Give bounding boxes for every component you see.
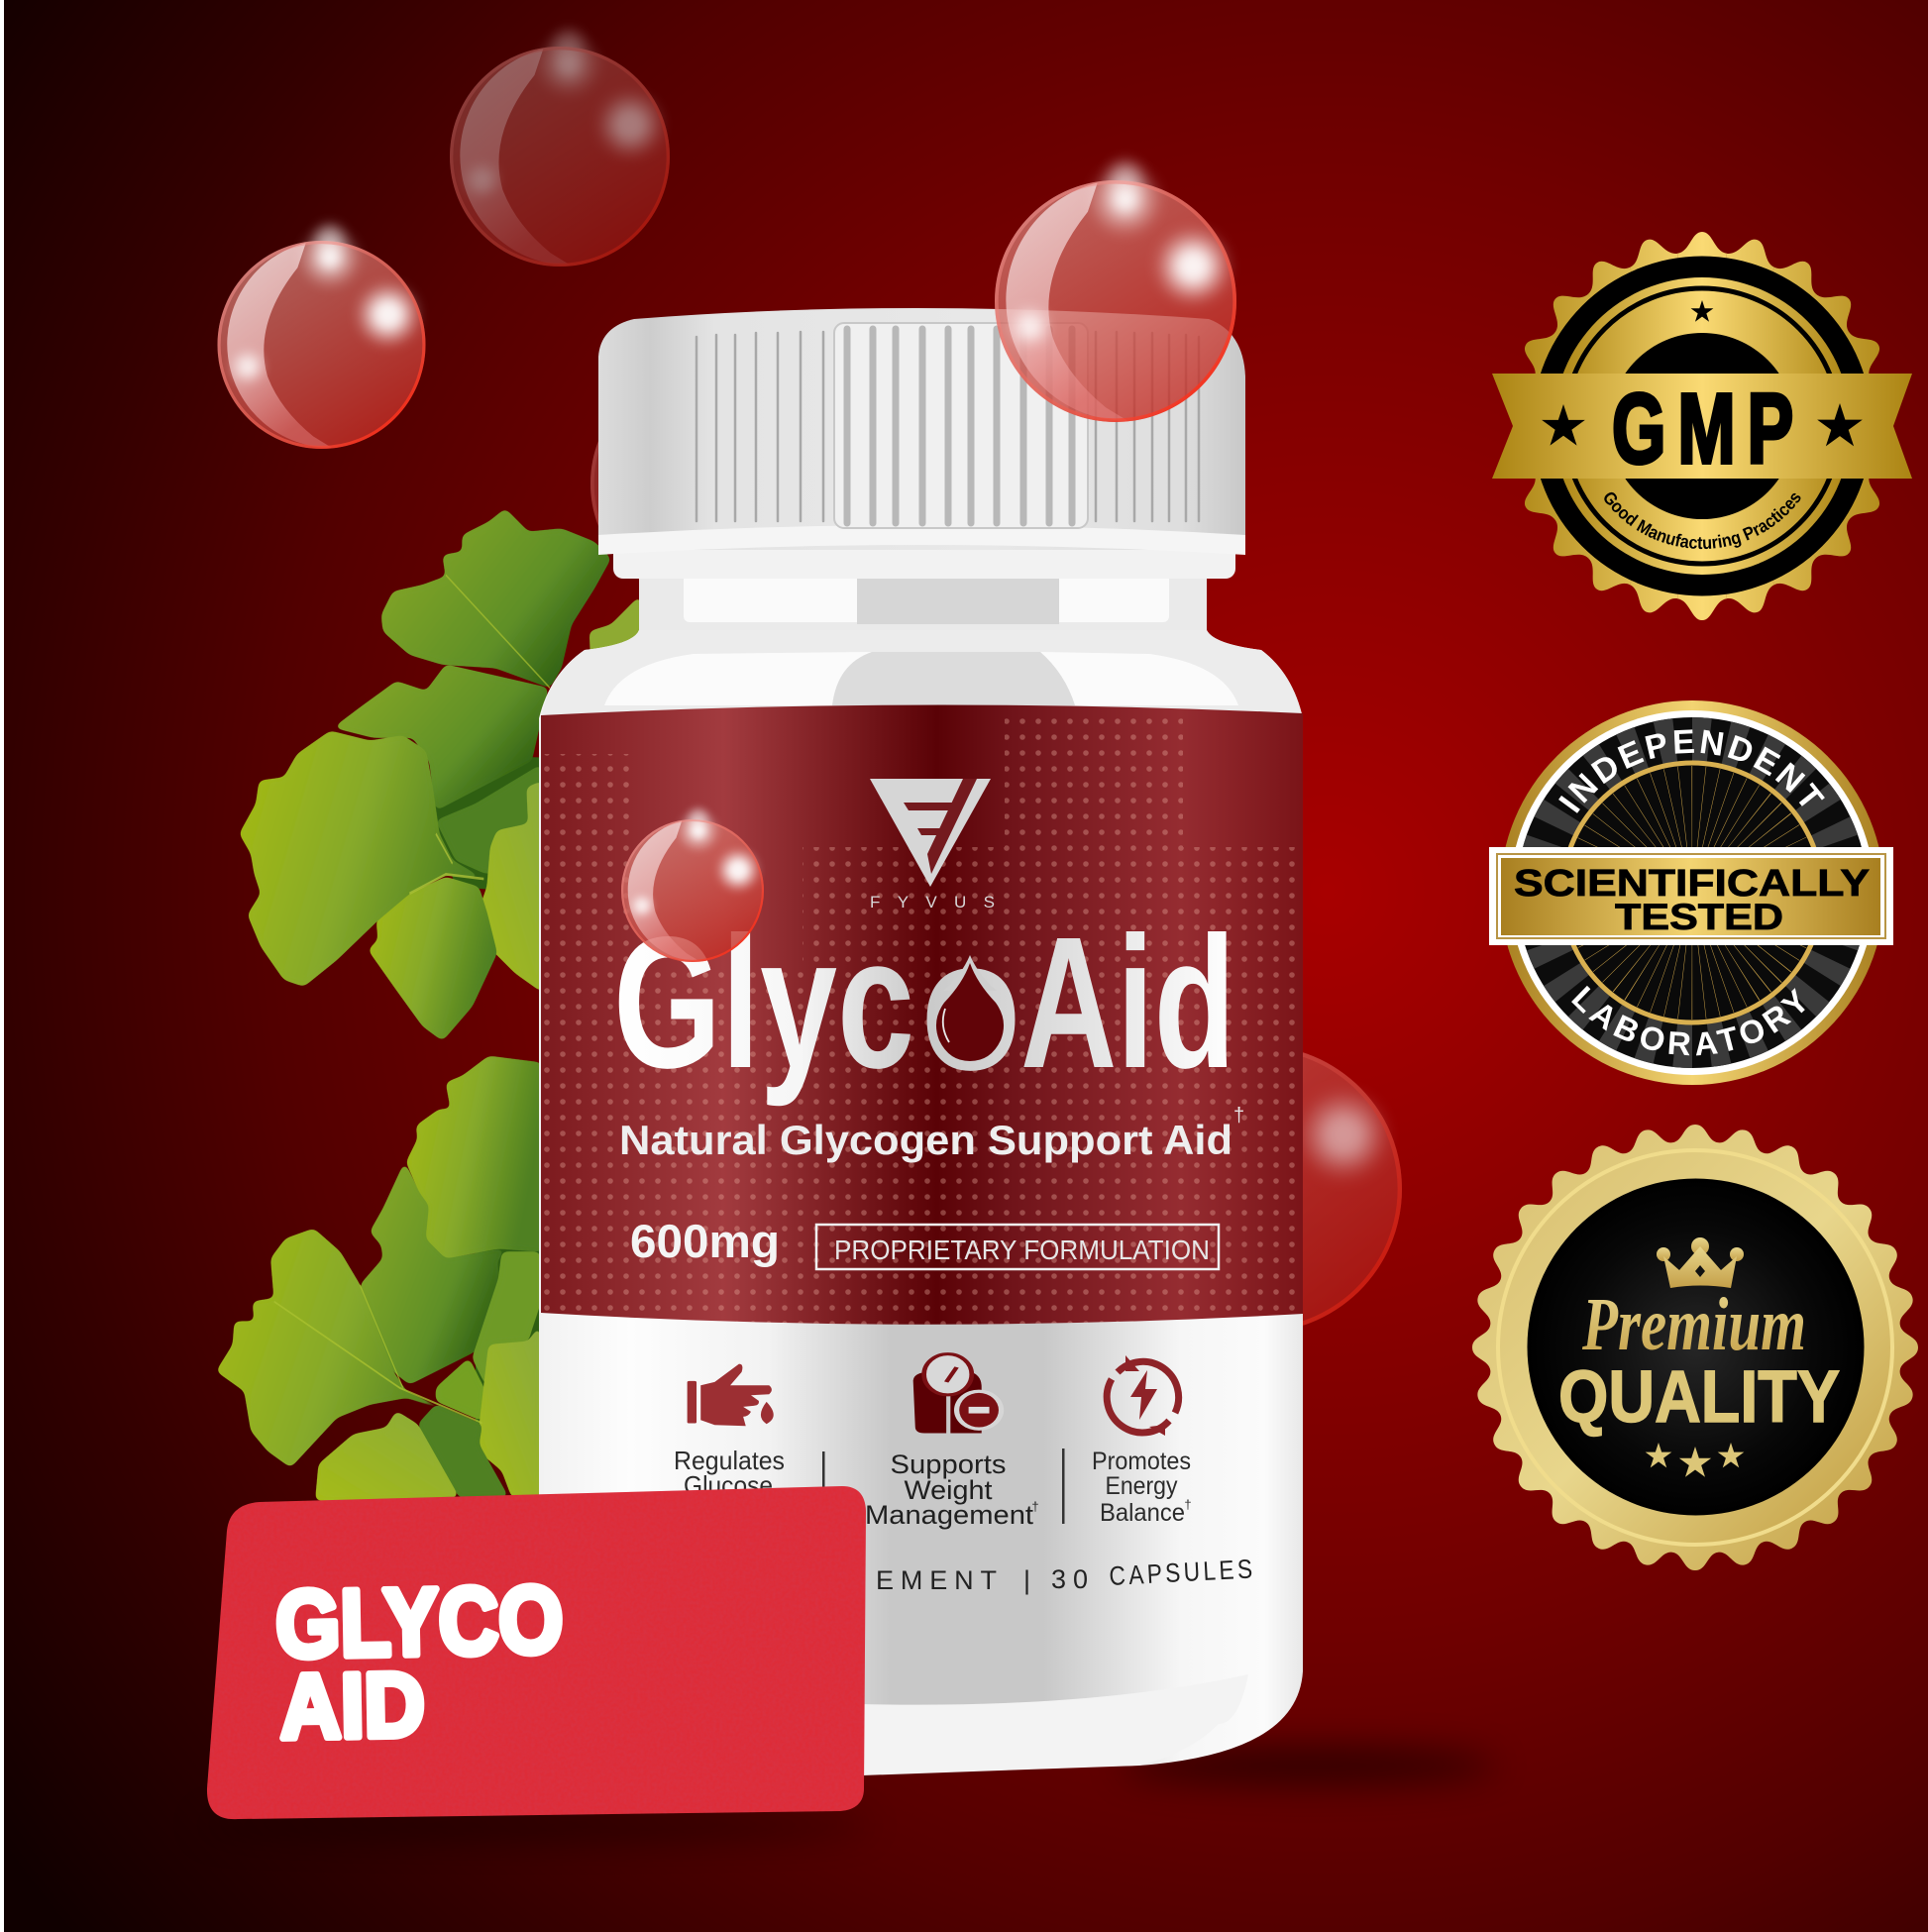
QUALITY: QUALITY [1558,1355,1840,1438]
banner [1489,847,1893,945]
neck highlights [684,562,1169,624]
leaf: left big fan [216,1229,482,1467]
bubble: right behind bottle [1093,1006,1421,1351]
card wordmark: GLYCO [274,1566,564,1677]
formulation box: PROPRIETARY FORMULATION [834,1234,1210,1265]
benefit: promotes energy balance [1092,1448,1192,1527]
cap centre panel [834,323,1088,528]
product name: Glyc [613,899,914,1108]
supplement line: EMENT [876,1565,1003,1595]
cap band [598,525,1245,555]
bubble: hidden behind cap [590,347,828,602]
dosage: 600mg [630,1215,780,1267]
leaf: second dark [334,665,548,810]
formulation box [816,1225,1219,1269]
seal outer [1524,232,1880,620]
ring segments [1539,739,1846,1046]
benefit: regulates glucose [674,1446,785,1500]
shoulder [541,630,1303,718]
benefit: promotes energy balance: † [1184,1497,1192,1512]
supplement line: | [1023,1565,1030,1595]
bubble: on label [621,808,764,962]
benefit: supports weight management: Weight [904,1475,993,1505]
benefit: promotes energy balance: Promotes [1092,1448,1191,1475]
badge: GMP [1492,232,1912,620]
bubble: on bottle cap [995,162,1236,422]
icon: hand with blood drop [688,1364,774,1426]
product label [541,704,1303,1338]
bottle body [539,630,1303,1775]
bubble: top left bright [218,225,426,449]
leaf: bottom right [473,1251,540,1391]
leaf: bottom behind [436,1358,485,1421]
card wordmark [274,1566,566,1758]
shaded backing of leaves [429,754,542,1494]
star top [1691,300,1713,322]
base highlight [862,1674,1248,1775]
supplement line: 30 [1051,1564,1088,1594]
leaf: main large fan [240,731,483,987]
scalloped seal [1472,1125,1918,1570]
leaf: bottom rear fan [360,1162,505,1384]
benefit: promotes energy balance: Energy [1106,1472,1178,1500]
ribbon [1492,374,1912,479]
tagline: Natural Glycogen Support Aid [619,1117,1232,1163]
bottle neck [639,570,1207,644]
dagger: † [1233,1105,1244,1127]
banner: TESTED [1615,897,1783,937]
ribbon stars [1542,403,1863,446]
leaf: lower fan [369,877,497,1040]
benefit: promotes energy balance: Balance [1100,1499,1185,1527]
small leaf behind neck [589,594,641,665]
bubble: top dim [450,30,670,267]
dotted pattern [541,715,1303,1338]
label band [541,704,1303,1325]
three stars [1646,1443,1744,1477]
product name: Aid [1020,899,1235,1108]
shadow under bottle [1120,1748,1496,1783]
supplement line: CAPSULES [1109,1554,1256,1591]
badge: scientifically tested [1489,700,1893,1085]
brand logo: FYVUS [870,893,995,912]
benefit: supports weight management: Management [865,1500,1034,1530]
supplement line [876,1554,1256,1595]
brand logo [870,779,995,912]
product name: o [920,901,1021,1110]
banner: SCIENTIFICALLY [1514,863,1870,905]
icon: energy cycle [1107,1355,1179,1436]
badge: premium quality [1472,1125,1918,1570]
Premium script: Premium [1581,1283,1806,1366]
benefit: supports weight management: † [1031,1499,1039,1514]
leaf: bottom top fan [406,1056,542,1258]
shoulder highlight [604,652,1238,705]
icon: weight scale [913,1354,1004,1434]
leaf: bottom centre [418,1404,508,1497]
cap ridges [696,329,1199,523]
bottle cap [598,308,1245,550]
leaf: top fan [381,508,611,688]
crown [1657,1237,1744,1288]
sunburst [1615,815,1769,970]
GMP wordmark: GMP [1612,375,1805,484]
blood drop in the o [936,955,1004,1061]
benefit: regulates glucose: Regulates [674,1446,785,1475]
benefit: supports weight management [865,1449,1039,1530]
red card [203,1481,869,1823]
benefit: supports weight management: Supports [890,1449,1007,1479]
benefit: regulates glucose: Glucose [684,1470,773,1500]
leaf: right shade [436,764,542,874]
leaf: right lime [479,781,543,993]
card wordmark: AID [279,1655,426,1758]
ginkgo leaves [216,508,641,1501]
leaf: bottom right lime [478,1325,540,1497]
leaf: bottom lime [315,1411,459,1501]
bottle [539,308,1303,1775]
ring text bottom: LABORATORY [1571,985,1805,1056]
product name [613,899,1235,1110]
ring text top: INDEPENDENT [1558,729,1825,813]
shadow under card [198,1815,872,1835]
curved caption: Good Manufacturing Practices [1604,491,1801,549]
cap collar [613,535,1235,579]
benefits row [674,1354,1256,1595]
